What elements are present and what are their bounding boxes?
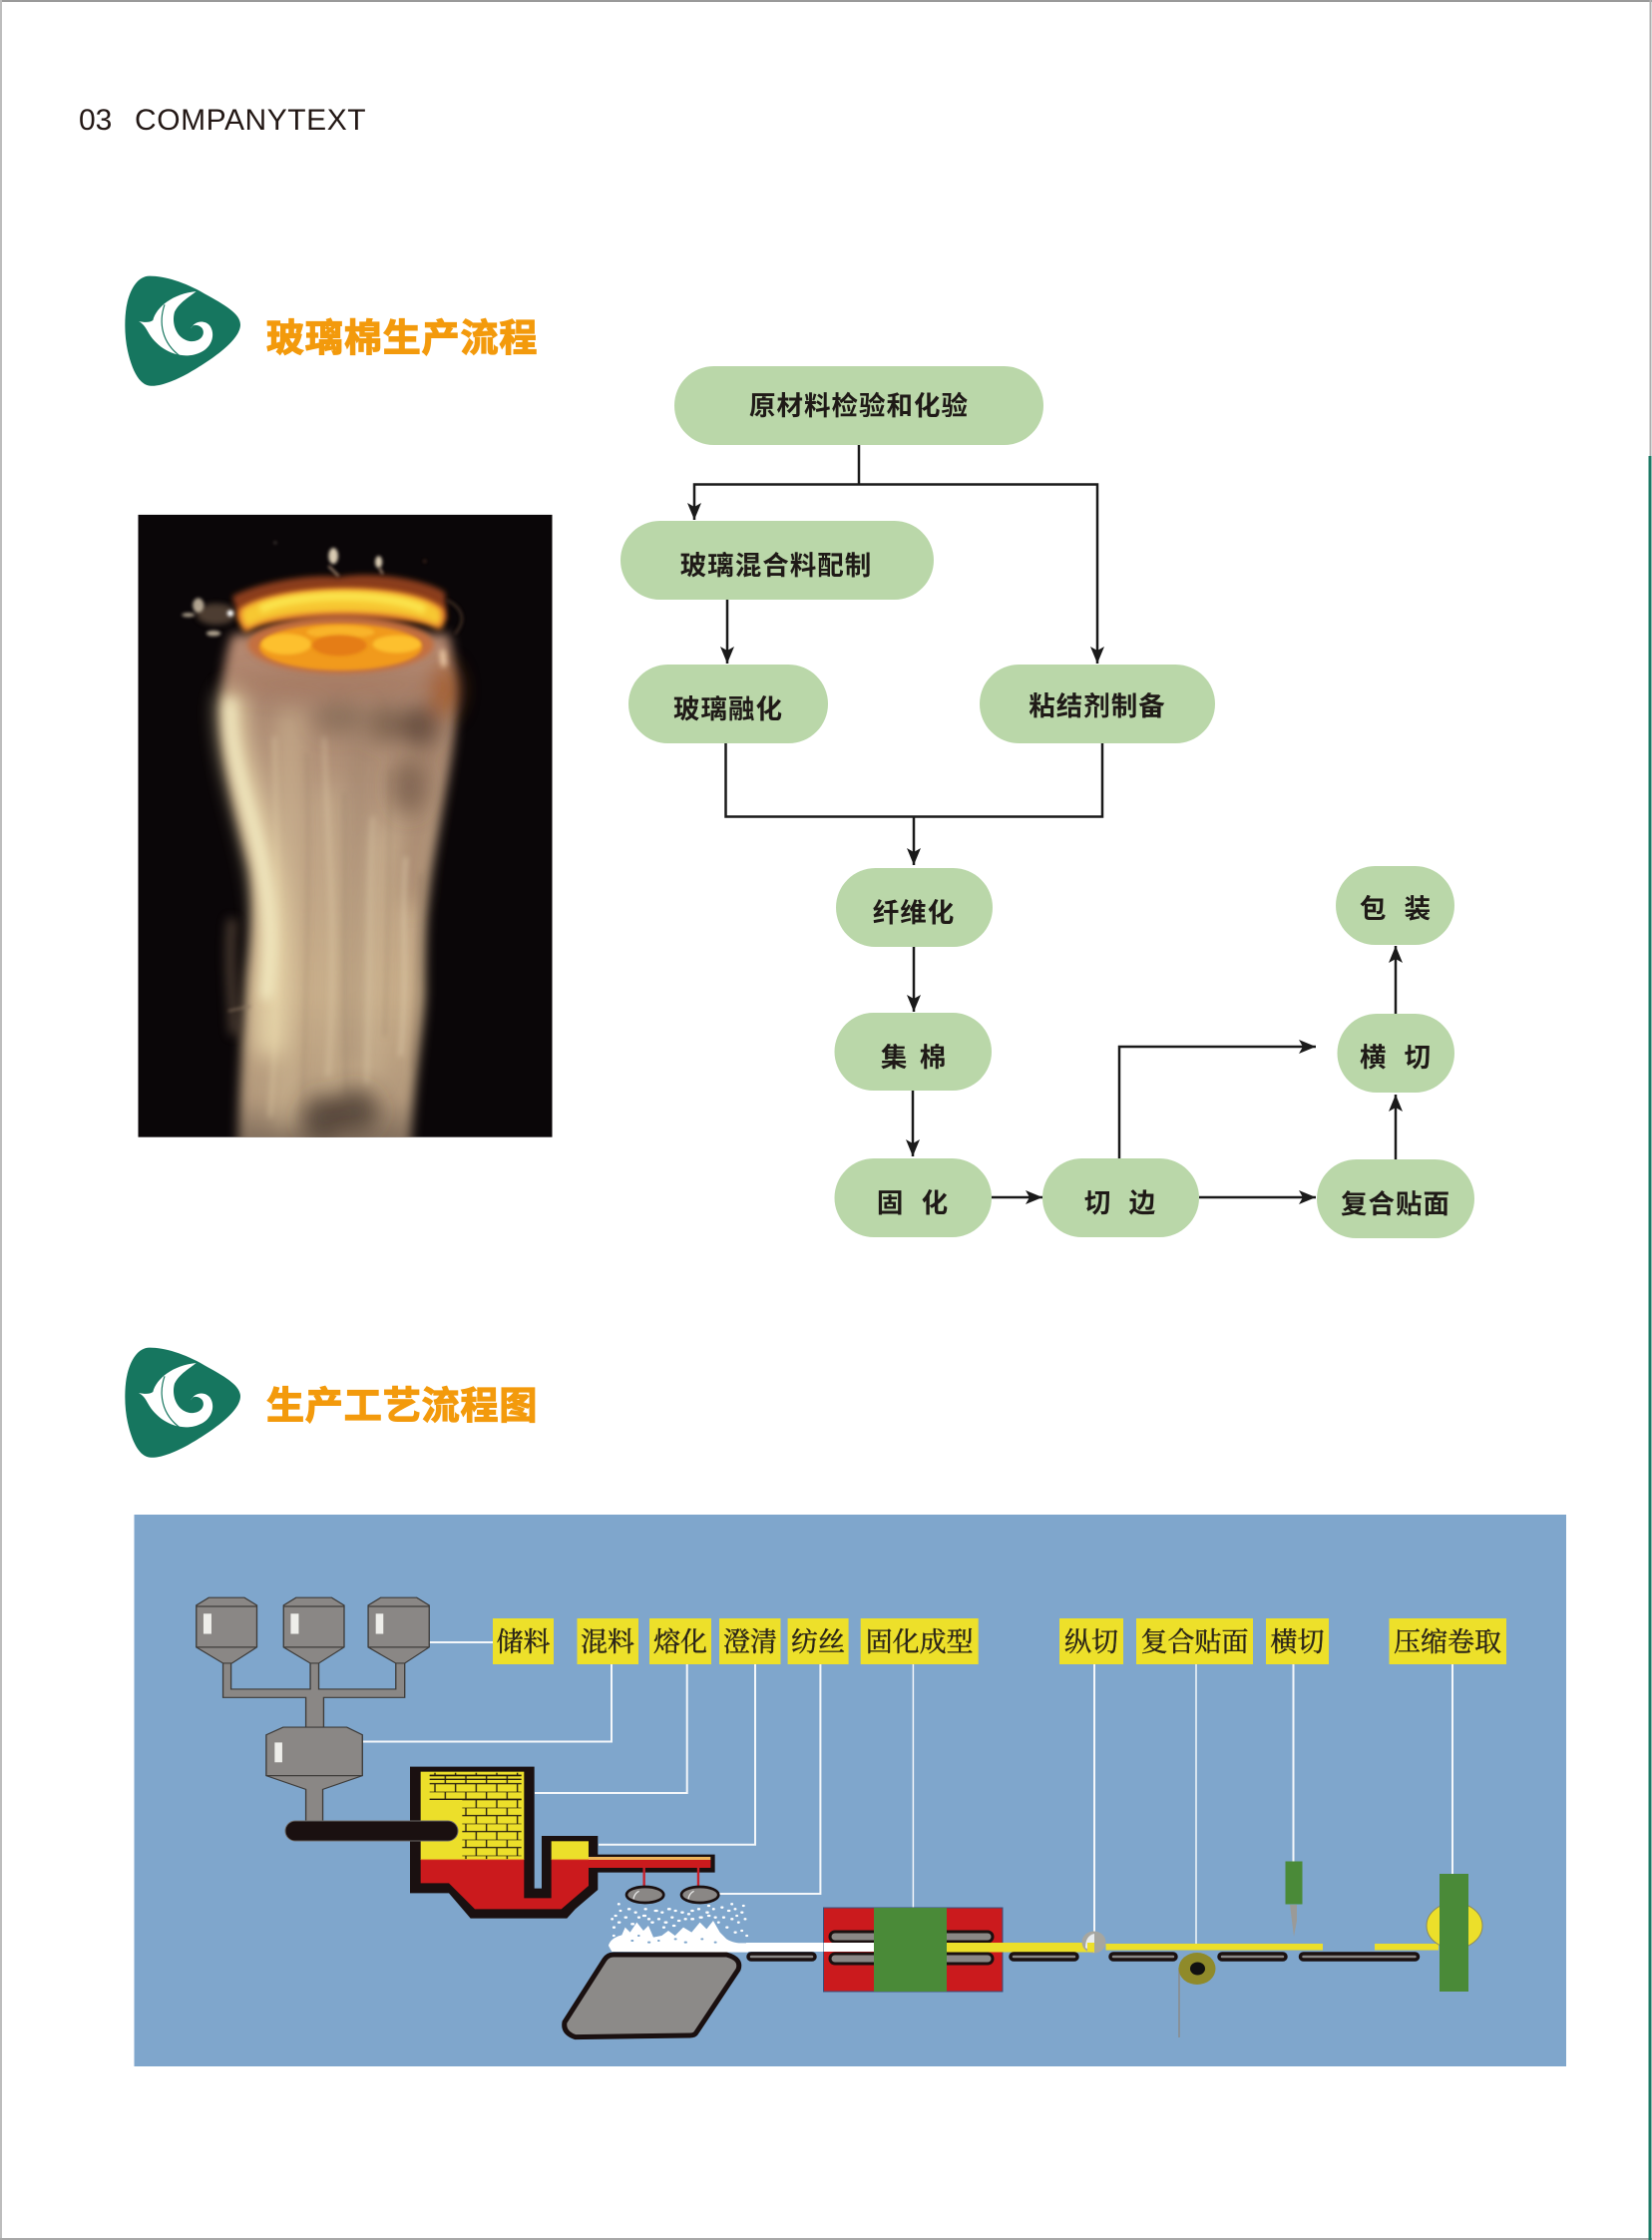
glass fibre spray — [609, 1904, 748, 1953]
feed conveyor — [285, 1821, 458, 1841]
silo 1 — [197, 1597, 256, 1663]
node: glass melting — [628, 665, 828, 743]
fine streak texture — [270, 738, 421, 1116]
heading: glass wool production process: 玻璃棉生产流程 — [266, 318, 538, 360]
left bright edge of flame — [232, 702, 273, 1043]
label: spinning: 纺丝 — [791, 1627, 845, 1657]
arrow: collecting to curing — [912, 1091, 914, 1156]
label: compression winding: 压缩卷取 — [1394, 1627, 1501, 1657]
label: melting — [649, 1618, 711, 1664]
roll conveyors — [1011, 1954, 1419, 1960]
heading: production process diagram: 生产工艺流程图 — [266, 1386, 538, 1428]
melting furnace — [410, 1767, 715, 1919]
node: curing — [834, 1158, 992, 1237]
node: fiberising — [836, 868, 993, 947]
node: edge cutting — [1042, 1158, 1199, 1237]
label: storage: 储料 — [497, 1627, 551, 1657]
photo: glass fiber flame — [138, 515, 553, 1155]
teal right edge bar — [1648, 456, 1652, 2240]
icon: company logo (section 1) — [125, 276, 240, 386]
panel: production line diagram — [134, 1515, 1566, 2066]
arrow: edge cutting to cross cutting — [1119, 1047, 1316, 1158]
label: cross cutting — [1266, 1618, 1329, 1664]
label: curing and forming — [861, 1618, 979, 1664]
node: binder preparation — [980, 665, 1215, 743]
label: slitting — [1059, 1618, 1123, 1664]
label: cross cutting: 横切 — [1271, 1627, 1325, 1657]
cross cutter — [1285, 1862, 1303, 1937]
silo pipes — [223, 1660, 405, 1729]
node: edge cutting: 切 边 — [1084, 1188, 1156, 1218]
process labels — [493, 1618, 1506, 1664]
node: glass batch mixing — [620, 521, 934, 600]
soft broad streaks — [286, 714, 431, 1116]
label: slitting: 纵切 — [1064, 1627, 1118, 1657]
label: facing — [1136, 1618, 1253, 1664]
label: mixing: 混料 — [581, 1627, 634, 1657]
node: cross cutting: 横 切 — [1360, 1043, 1432, 1073]
node: facing lamination — [1317, 1159, 1474, 1238]
silo 3 — [368, 1597, 429, 1663]
arrow: fiberising to collecting — [913, 947, 915, 1012]
curing oven — [824, 1908, 1094, 1992]
arrow: cross cutting to packing — [1395, 946, 1397, 1014]
label: mixing — [577, 1618, 638, 1664]
node: glass batch mixing: 玻璃混合料配制 — [680, 551, 872, 581]
node: packing: 包 装 — [1360, 894, 1432, 924]
fiberising spinners with stems — [626, 1868, 718, 1903]
arrow: mix to melt — [726, 600, 728, 664]
compression and winding unit — [1427, 1874, 1482, 1992]
leader lines from labels to equipment — [362, 1642, 1452, 1944]
label: fining: 澄清 — [723, 1627, 777, 1657]
conveyor under fibre band — [748, 1954, 815, 1960]
slitter wheel — [1081, 1932, 1105, 1954]
node: wool collecting: 集 棉 — [881, 1043, 947, 1073]
node: raw material inspection — [674, 366, 1043, 445]
label: compression winding — [1389, 1618, 1506, 1664]
arrow: edge cutting to facing — [1199, 1196, 1316, 1198]
hopper — [565, 1955, 739, 2037]
header: page number and company text: 03 — [79, 104, 112, 137]
mixer — [266, 1727, 362, 1823]
facing web — [1105, 1944, 1439, 1950]
storage silos and mixer — [197, 1597, 429, 1823]
label: fining — [719, 1618, 780, 1664]
node: cross cutting — [1337, 1014, 1454, 1093]
label: melting: 熔化 — [653, 1627, 707, 1657]
node: raw material inspection: 原材料检验和化验 — [749, 391, 969, 421]
icon: company logo (section 2) — [125, 1348, 240, 1458]
glowing top ring — [232, 575, 447, 620]
arrow: facing to cross cutting — [1395, 1095, 1397, 1159]
node: packing — [1336, 866, 1454, 945]
node: facing lamination: 复合贴面 — [1341, 1189, 1450, 1219]
facing roller — [1179, 1953, 1215, 2037]
arrow: curing to edge cutting — [992, 1196, 1042, 1198]
connector: melt and binder merge to fiberising — [726, 743, 1102, 865]
node: binder preparation: 粘结剂制备 — [1029, 691, 1166, 721]
brick wall — [430, 1773, 522, 1859]
label: facing: 复合贴面 — [1141, 1627, 1249, 1657]
node: glass melting: 玻璃融化 — [673, 694, 783, 724]
connector: raw material split to mix and binder — [694, 445, 1097, 664]
droplets and debris — [182, 542, 426, 637]
flowchart: glass wool process — [620, 366, 1474, 1238]
header: page number and company text: COMPANYTEXT — [135, 104, 366, 137]
silo 2 — [283, 1597, 344, 1663]
node: fiberising: 纤维化 — [873, 898, 955, 928]
label: storage — [493, 1618, 554, 1664]
node: curing: 固 化 — [877, 1188, 949, 1218]
fibre web band — [746, 1943, 874, 1952]
label: curing and forming: 固化成型 — [866, 1627, 974, 1657]
node: wool collecting — [834, 1013, 992, 1091]
label: spinning — [788, 1618, 849, 1664]
